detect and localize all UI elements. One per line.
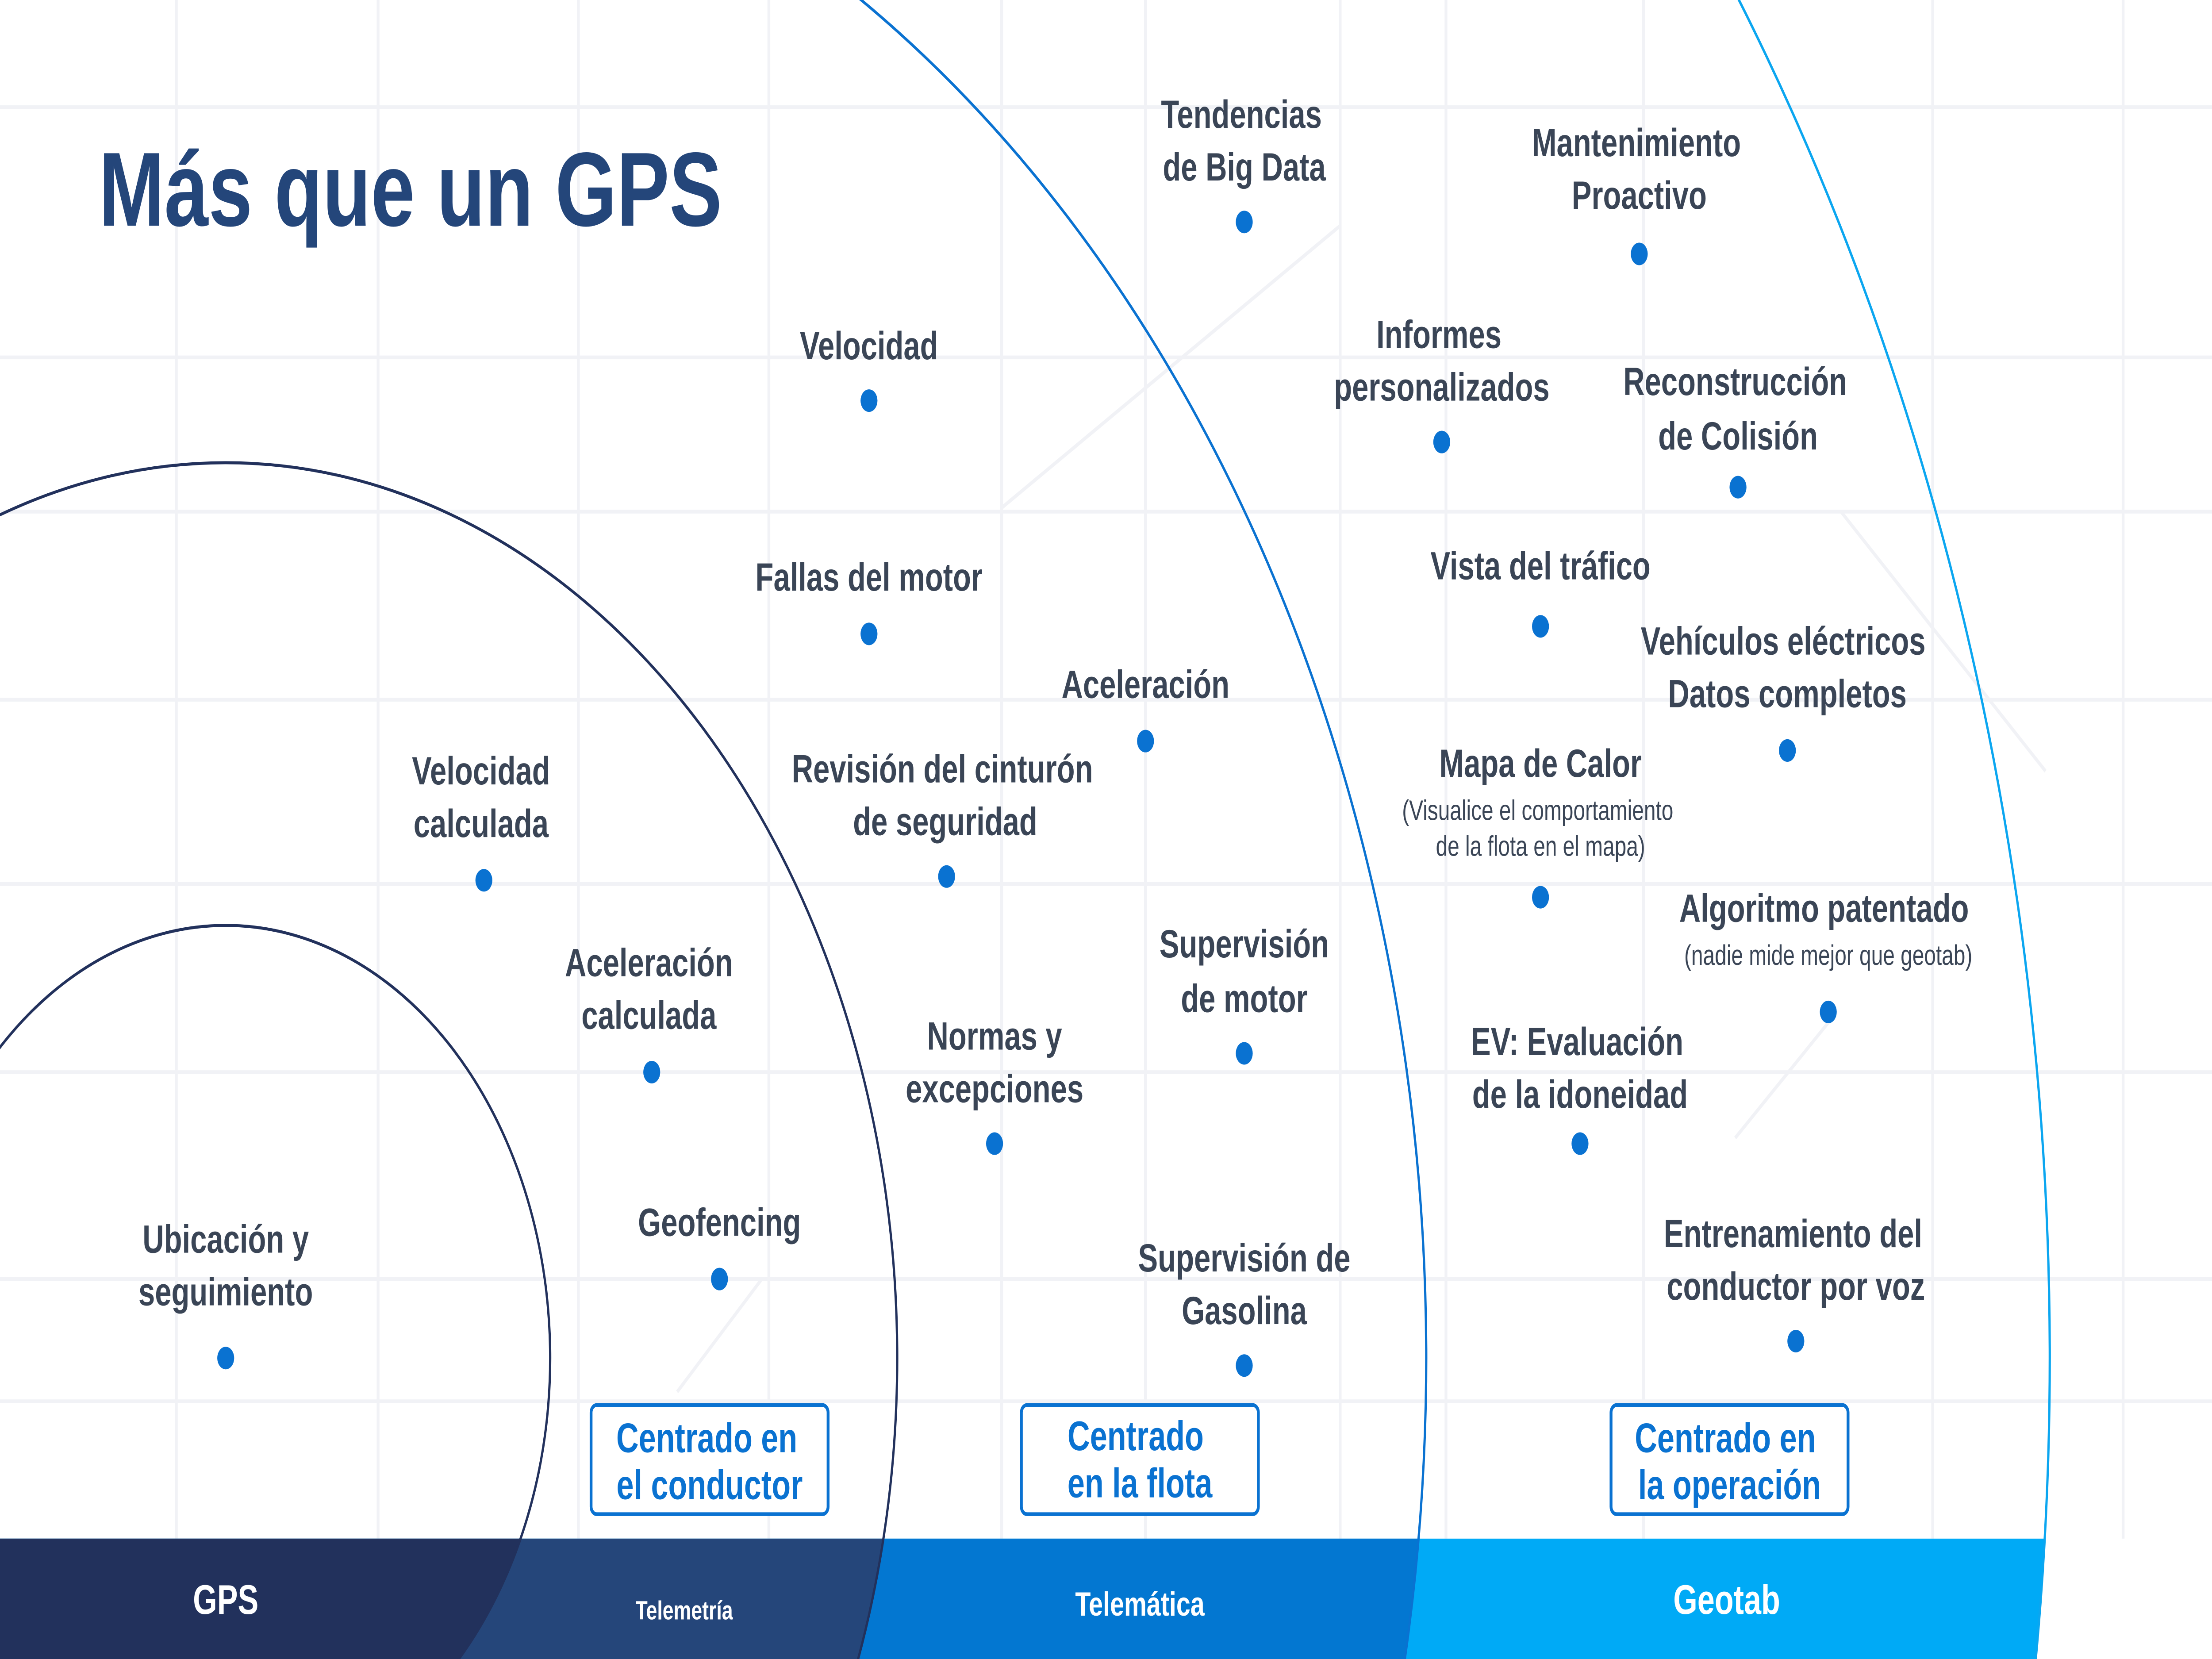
feature labels: Algoritmo patentado: [1679, 886, 1969, 930]
feature labels: Fallas del motor: [756, 555, 983, 599]
feature labels: calculada: [414, 802, 549, 845]
feature labels: de la idoneidad: [1472, 1072, 1688, 1116]
feature labels: Tendencias: [1161, 92, 1322, 136]
feature labels: Revisión del cinturón: [792, 747, 1093, 791]
bottom bar: [0, 1539, 2044, 1659]
box: centrado en la operacion: [1611, 1405, 1848, 1514]
box: centrado en el conductor: [591, 1405, 828, 1514]
feature labels: Gasolina: [1182, 1289, 1307, 1333]
feature labels: excepciones: [906, 1067, 1083, 1111]
feature labels: Normas y: [927, 1014, 1062, 1058]
feature labels: personalizados: [1334, 365, 1550, 409]
bottom bar: Telemetría: [636, 1596, 733, 1625]
box: centrado en la flota: [1022, 1405, 1258, 1514]
feature labels: Datos completos: [1668, 672, 1907, 716]
feature labels: Aceleración: [565, 941, 733, 985]
feature labels: Informes: [1376, 312, 1502, 357]
box: centrado en la operacion: la operación: [1638, 1462, 1821, 1508]
feature labels: Ubicación y: [142, 1217, 309, 1261]
feature labels: Supervisión: [1160, 922, 1329, 966]
feature labels: de motor: [1181, 976, 1308, 1021]
feature labels: Proactivo: [1572, 173, 1707, 217]
box: centrado en el conductor: Centrado en: [616, 1414, 797, 1461]
dots: [217, 211, 1837, 1377]
box: centrado en la flota: Centrado: [1068, 1413, 1204, 1459]
feature labels: Mantenimiento: [1532, 121, 1741, 165]
feature labels: calculada: [581, 993, 717, 1037]
feature labels: Aceleración: [1061, 662, 1229, 707]
feature labels: de Colisión: [1658, 414, 1818, 458]
feature labels: [138, 92, 1972, 1333]
feature labels: seguimiento: [138, 1270, 313, 1314]
bottom bar: Telemática: [1075, 1586, 1205, 1623]
feature labels: (nadie mide mejor que geotab): [1684, 939, 1972, 971]
bottom bar: GPS: [193, 1576, 258, 1623]
feature labels: Vista del tráfico: [1430, 544, 1651, 588]
feature labels: Velocidad: [412, 749, 550, 793]
feature labels: (Visualice el comportamiento: [1402, 795, 1673, 826]
bottom bar: Geotab: [1673, 1576, 1780, 1623]
feature labels: Geofencing: [638, 1200, 801, 1244]
feature labels: Entrenamiento del: [1664, 1212, 1922, 1256]
feature labels: de seguridad: [853, 799, 1037, 844]
box: centrado en el conductor: el conductor: [617, 1462, 803, 1508]
feature labels: de la flota en el mapa): [1436, 830, 1645, 862]
title: Más que un GPS: [99, 130, 722, 248]
feature labels: Mapa de Calor: [1439, 741, 1642, 785]
feature labels: Supervisión de: [1138, 1236, 1350, 1280]
box: centrado en la operacion: Centrado en: [1635, 1414, 1816, 1461]
feature labels: de Big Data: [1163, 145, 1326, 189]
feature labels: Vehículos eléctricos: [1641, 619, 1926, 663]
feature labels: Velocidad: [800, 324, 938, 368]
feature labels: EV: Evaluación: [1471, 1020, 1683, 1064]
feature labels: Reconstrucción: [1623, 360, 1847, 403]
box: centrado en la flota: en la flota: [1068, 1460, 1213, 1506]
feature labels: conductor por voz: [1667, 1264, 1925, 1308]
